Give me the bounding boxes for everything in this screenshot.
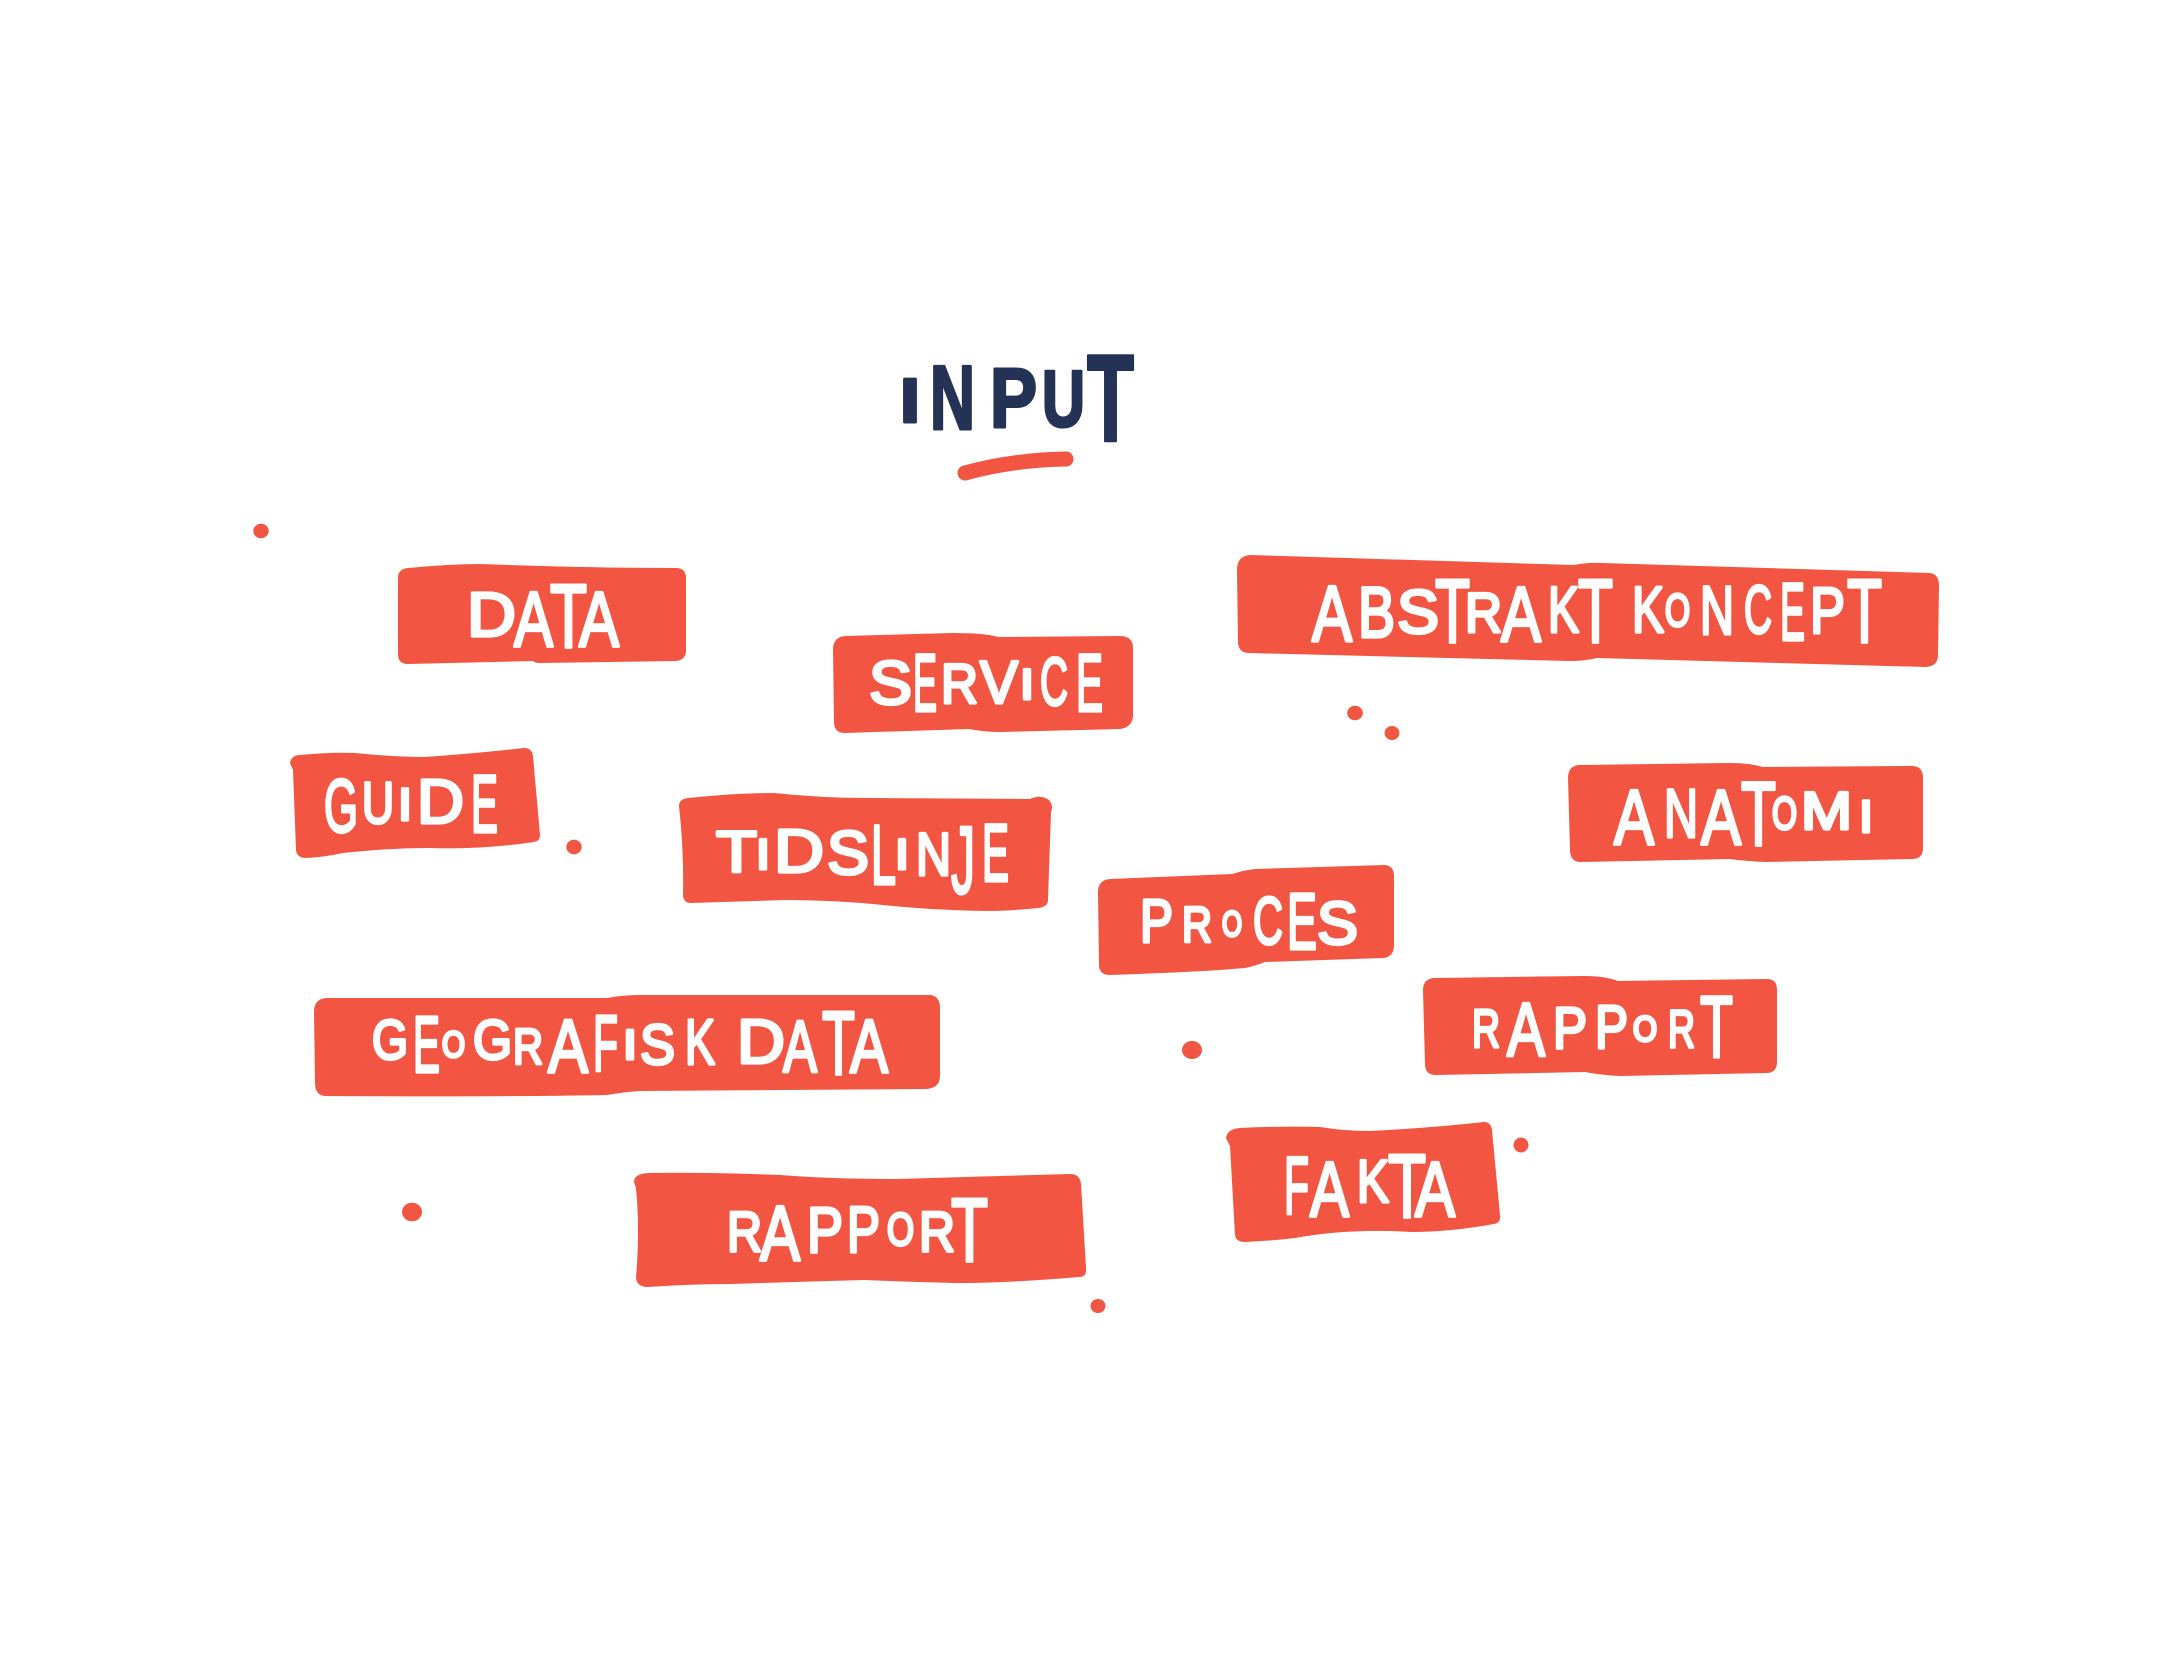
tag shape bbox=[290, 748, 540, 858]
tag label: S bbox=[1397, 578, 1439, 646]
tag shape bbox=[634, 1173, 1086, 1287]
tag label: A bbox=[548, 1004, 588, 1088]
tag label: A bbox=[579, 575, 619, 663]
tag label: T bbox=[1388, 1137, 1426, 1237]
tag label: P bbox=[1553, 996, 1587, 1061]
tag label: R bbox=[941, 652, 978, 715]
tag label: O bbox=[1772, 788, 1797, 839]
tag label: K bbox=[1632, 573, 1664, 646]
tag label: F bbox=[593, 999, 618, 1088]
tag label: T bbox=[951, 1181, 988, 1281]
tag label: O bbox=[887, 1204, 914, 1255]
tag label: A bbox=[783, 1007, 817, 1088]
title text: P bbox=[990, 351, 1037, 445]
tag label: R bbox=[1472, 999, 1500, 1059]
tag label: I bbox=[623, 1021, 637, 1068]
tag label: L bbox=[871, 808, 896, 902]
tag label: G bbox=[372, 1008, 408, 1071]
tag label: I bbox=[895, 831, 909, 879]
tag: SERVICE bbox=[833, 633, 1133, 733]
tag label: A bbox=[1701, 773, 1741, 861]
tag label: P bbox=[1810, 574, 1845, 647]
tag label: C bbox=[1253, 884, 1283, 959]
tag label: E bbox=[413, 1000, 440, 1089]
tag: GUIDE: E bbox=[471, 759, 498, 850]
tag label: O bbox=[1222, 905, 1242, 944]
tag label: A bbox=[850, 1004, 888, 1088]
tag label: A bbox=[1312, 569, 1352, 658]
tag label: T bbox=[1741, 764, 1776, 865]
tag shape bbox=[833, 633, 1133, 733]
tag label: K bbox=[685, 1006, 715, 1078]
tag label: R bbox=[919, 1200, 955, 1264]
tag label: G bbox=[473, 1008, 512, 1071]
tag label: A bbox=[760, 1189, 800, 1277]
tag: FAKTA bbox=[1226, 1122, 1500, 1242]
tag: RAPPORT (right) bbox=[1423, 976, 1777, 1076]
tag label: C bbox=[1040, 644, 1068, 720]
decorative dots bbox=[253, 524, 1528, 1313]
tag label: A bbox=[1310, 1145, 1349, 1233]
tag shape bbox=[1237, 555, 1939, 667]
tag label: E bbox=[1287, 877, 1317, 966]
tag shape bbox=[1423, 976, 1777, 1076]
tag label: O bbox=[442, 1024, 465, 1065]
tag shape bbox=[1098, 865, 1394, 975]
tag label: R bbox=[1182, 897, 1212, 953]
tag label: A bbox=[1415, 1145, 1455, 1233]
tag: RAPPORT (bottom) bbox=[634, 1173, 1086, 1287]
tag label: M bbox=[1801, 782, 1852, 841]
tag label: D bbox=[467, 581, 516, 650]
tag label: F bbox=[1284, 1141, 1309, 1232]
tag label: I bbox=[756, 831, 770, 879]
title text: N bbox=[930, 348, 975, 449]
tag label: S bbox=[827, 819, 869, 887]
tag: PROCES bbox=[1098, 865, 1394, 975]
tag label: R bbox=[1465, 581, 1502, 644]
tag label: T bbox=[1700, 979, 1733, 1076]
tag shape bbox=[314, 995, 940, 1096]
tag label: I bbox=[398, 779, 412, 830]
tag label: T bbox=[716, 820, 757, 885]
tag label: E bbox=[913, 638, 937, 729]
tag label: O bbox=[1665, 585, 1690, 636]
tag label: N bbox=[1700, 572, 1734, 649]
tag: GEOGRAFISK DATA bbox=[314, 994, 940, 1096]
tag label: I bbox=[1859, 791, 1873, 842]
tag label: A bbox=[1501, 570, 1541, 658]
tag shape bbox=[1226, 1122, 1500, 1242]
tag label: P bbox=[1140, 887, 1173, 955]
tag shape bbox=[679, 793, 1052, 911]
tag label: N bbox=[916, 821, 951, 888]
tag label: P bbox=[1595, 993, 1628, 1061]
title underline bbox=[965, 459, 1066, 473]
tag label: K bbox=[1548, 573, 1579, 646]
tag label: V bbox=[980, 649, 1018, 716]
tag label: T bbox=[1435, 562, 1470, 662]
title text: T bbox=[1087, 331, 1134, 468]
tag label: N bbox=[1664, 775, 1698, 852]
tag label: G bbox=[324, 764, 358, 848]
tag: TIDSLINJE bbox=[679, 793, 1052, 914]
tag: GUIDE bbox=[290, 748, 540, 858]
tag label: C bbox=[1744, 572, 1772, 648]
tag label: S bbox=[640, 1013, 675, 1077]
tag shape bbox=[1568, 763, 1923, 862]
tag label: A bbox=[1614, 773, 1654, 861]
tag label: D bbox=[774, 817, 824, 885]
tag label: T bbox=[1578, 562, 1613, 662]
tag label: E bbox=[1780, 567, 1805, 658]
tag label: R bbox=[727, 1200, 762, 1264]
tag label: A bbox=[514, 575, 553, 663]
tag label: S bbox=[869, 649, 912, 717]
tag label: T bbox=[822, 994, 855, 1094]
title text: I bbox=[900, 367, 920, 436]
tag label: P bbox=[847, 1193, 880, 1266]
tag label: A bbox=[1507, 988, 1545, 1073]
tag shape bbox=[398, 564, 686, 664]
tag label: T bbox=[550, 567, 587, 667]
tag: ABSTRAKT KONCEPT bbox=[1237, 555, 1939, 667]
tag label: J bbox=[951, 807, 975, 914]
tag label: K bbox=[1357, 1148, 1389, 1215]
tag: ANATOMI bbox=[1568, 763, 1923, 865]
tag: DATA bbox=[398, 564, 686, 667]
tag: TIDSLINJE: E bbox=[982, 808, 1009, 899]
tag label: R bbox=[513, 1019, 543, 1075]
tag label: R bbox=[1668, 1000, 1695, 1059]
title: INPUT bbox=[900, 331, 1134, 473]
tag label: D bbox=[737, 1008, 785, 1077]
tag label: T bbox=[1847, 562, 1882, 662]
tag label: I bbox=[1020, 661, 1034, 709]
tag label: P bbox=[807, 1194, 843, 1266]
tag label: O bbox=[1633, 1010, 1657, 1049]
tag label: B bbox=[1358, 574, 1395, 653]
tag: SERVICE: E bbox=[1076, 638, 1103, 729]
title text: U bbox=[1042, 354, 1085, 443]
tag label: D bbox=[417, 768, 464, 837]
tag label: U bbox=[362, 771, 394, 836]
tag label: S bbox=[1317, 890, 1358, 957]
